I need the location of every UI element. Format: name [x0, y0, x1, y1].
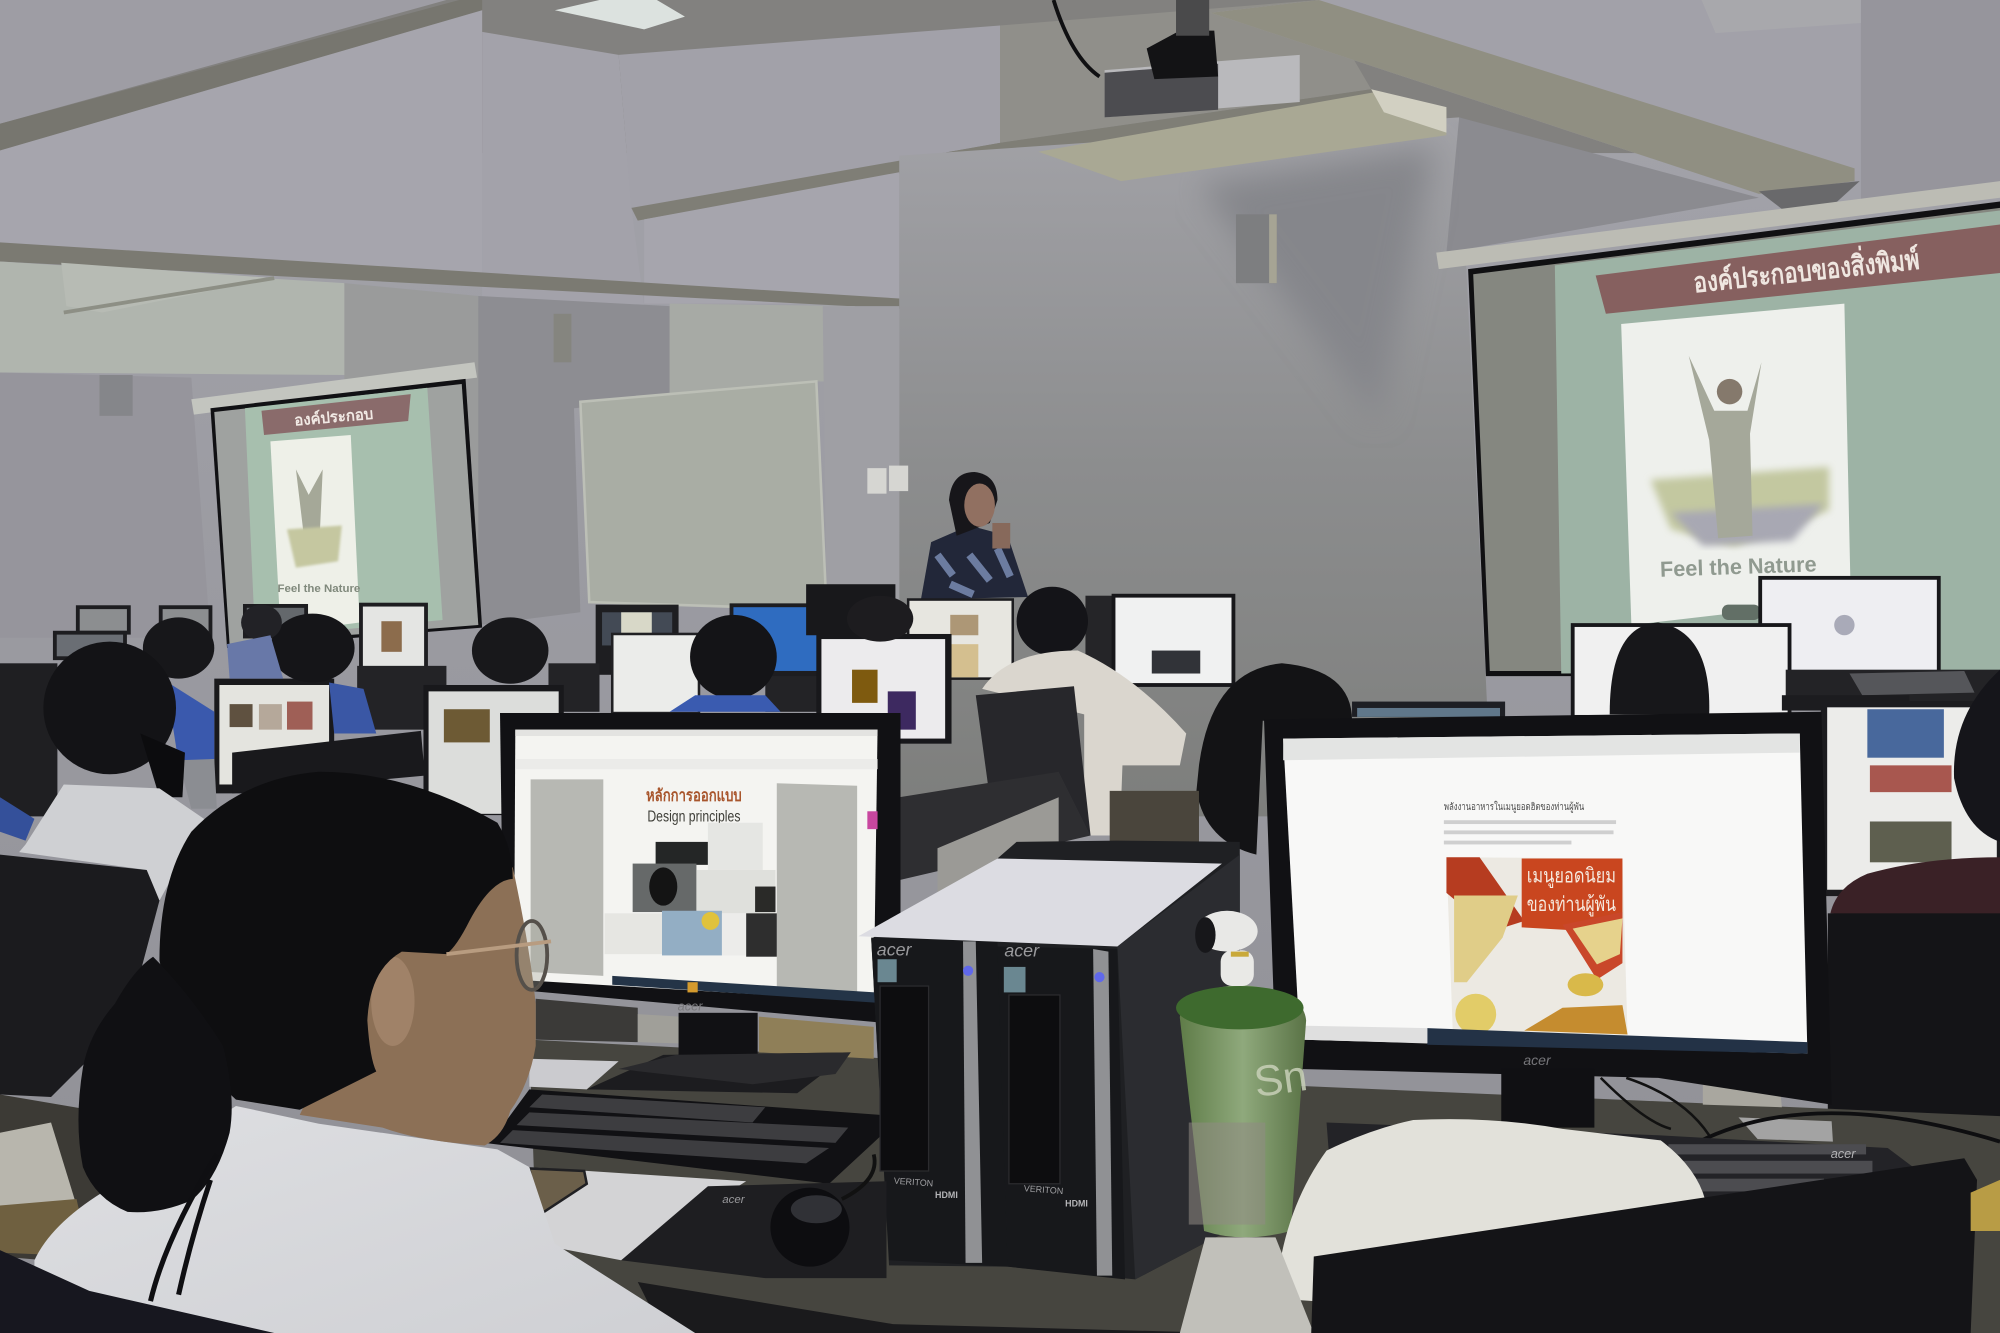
projector mount [1147, 31, 1218, 79]
mouse [770, 1154, 875, 1267]
snoopy figure [1195, 911, 1258, 986]
mouse pad and mouse: acer [722, 1194, 746, 1206]
keyboard left [485, 1089, 880, 1184]
slide collage [605, 823, 777, 957]
desktop towers [858, 841, 1240, 1279]
white cloth bag [1276, 1119, 1705, 1301]
taskbar [1427, 1028, 1807, 1054]
wall socket behind right monitor [1703, 1078, 1782, 1107]
monitor brand: acer [1523, 1052, 1552, 1068]
food poster [1446, 857, 1628, 1035]
items bottom desk [1180, 1237, 1314, 1333]
article body lines [1444, 820, 1616, 844]
poster [1621, 304, 1851, 625]
monitor brand: acer [678, 998, 703, 1013]
slide heading banner: องค์ประกอบของสิ่งพิมพ์ [1691, 239, 1921, 298]
speaker boxes and wall controls [99, 214, 1277, 494]
slide title: หลักการออกแบบ [646, 786, 742, 805]
projection screen: right [1436, 181, 2000, 676]
yellow item right [1971, 1180, 2000, 1231]
poster: Feel the Nature [1660, 551, 1817, 582]
student: white hoodie [976, 587, 1186, 836]
projection screen: left [191, 362, 482, 648]
monitor: design principles [500, 713, 901, 1093]
food poster: ของท่านผู้พัน [1527, 894, 1616, 917]
left office chair and floor [0, 855, 179, 1263]
tower left: VERITON [893, 1176, 933, 1188]
foreground chair left [0, 1250, 274, 1333]
article heading: พลังงานอาหารในเมนูยอดฮิตของท่านผู้พัน [1444, 801, 1584, 813]
monitor stand [587, 1013, 851, 1093]
student: blue shirt center [670, 615, 781, 712]
middle row monitors [214, 634, 952, 815]
whiteboard [580, 381, 827, 610]
food poster: เมนูยอดนิยม [1527, 866, 1616, 889]
hair [159, 772, 513, 1110]
slide title [646, 786, 742, 825]
tower right [997, 941, 1125, 1279]
monitor stand [1501, 1069, 1594, 1128]
side gray panels [531, 779, 857, 998]
hair tie [151, 1154, 217, 1301]
face [300, 867, 536, 1145]
drink cup with snoopy [1176, 911, 1310, 1237]
tower right: VERITON [1024, 1183, 1064, 1196]
student: blue shirt near screen [227, 605, 376, 733]
sheet of paper [858, 858, 1222, 946]
projector and air conditioner [1038, 0, 1446, 181]
slide title: Design principles [647, 808, 741, 825]
air conditioner [1038, 92, 1446, 181]
smartphone on desk [529, 1168, 587, 1216]
monitor: food article [1264, 712, 1832, 1128]
projector body [1105, 55, 1300, 117]
student: right back [1610, 622, 1709, 714]
student: white shirt with mask [0, 642, 204, 901]
projection screen: left: องค์ประกอบ [294, 405, 374, 430]
student: blue shirt far left [143, 617, 217, 809]
tower left [871, 938, 1008, 1267]
foreground chair right [1311, 1158, 1977, 1333]
back row students [0, 587, 1709, 906]
back row monitors and desks [0, 578, 2000, 816]
student: middle aisle [472, 617, 548, 684]
projector cable [1054, 0, 1099, 77]
tower right: acer [1004, 941, 1040, 961]
slide heading banner [1596, 225, 2000, 314]
keyboard right: acer [1831, 1146, 1856, 1161]
cables and adapter [1601, 1078, 2000, 1143]
ear [371, 957, 415, 1046]
presenter [921, 472, 1028, 600]
right edge monitor and student [1782, 670, 2000, 1117]
keyboard right [1327, 1123, 1939, 1225]
tower left: acer [877, 939, 913, 959]
drink cup with snoopy: Sn [1251, 1052, 1310, 1107]
tower left: HDMI [935, 1190, 958, 1200]
tower right: HDMI [1065, 1199, 1088, 1209]
foreground student [34, 772, 695, 1333]
taskbar [612, 976, 875, 1003]
mouse pad and mouse [621, 1154, 886, 1278]
hair bun [78, 957, 232, 1212]
desk surfaces [529, 999, 2000, 1333]
glasses [446, 921, 551, 990]
projection screen: left: Feel the Nature [277, 583, 360, 595]
student: dark curly hair [1196, 663, 1352, 855]
shirt [34, 1106, 695, 1333]
